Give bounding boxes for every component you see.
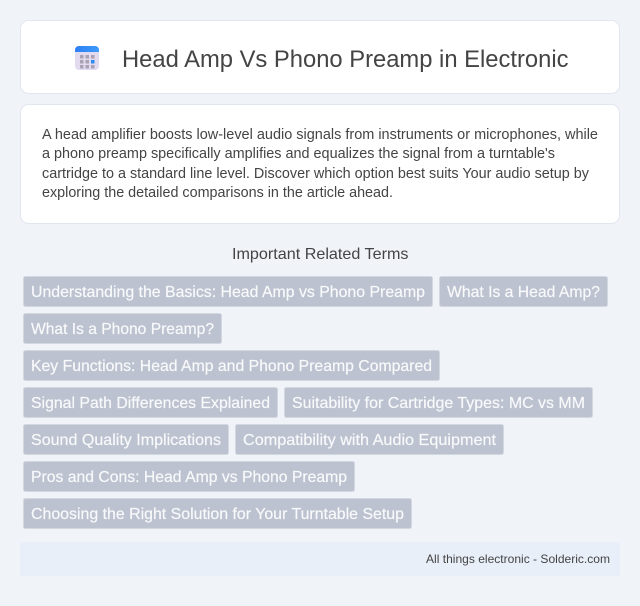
tag: signal path (24, 388, 278, 418)
text block: intro paragraph (42, 127, 598, 201)
footer (20, 542, 620, 576)
title: Head Amp Vs Phono Preamp in Electronic (122, 46, 568, 73)
text block: intro paragraph: cartridge to a standard line level. Discover which option best suits Your audio setup by (42, 166, 590, 182)
tag: what is a phono preamp: What Is a Phono Preamp? (31, 321, 214, 338)
tag: sound quality (24, 424, 228, 454)
tag: key functions: Key Functions: Head Amp and Phono Preamp Compared (31, 358, 432, 375)
tag: choosing the right solution: Choosing the Right Solution for Your Turntable Setup (31, 506, 404, 523)
tag: sound quality: Sound Quality Implications (31, 432, 221, 449)
tag: choosing the right solution (24, 498, 412, 528)
icon: calendar (75, 46, 99, 70)
text block: intro paragraph: A head amplifier boosts low-level audio signals from instruments or microphones, while (42, 127, 598, 143)
tag: signal path: Signal Path Differences Explained (31, 395, 270, 412)
tag: cartridge suitability: Suitability for Cartridge Types: MC vs MM (292, 395, 585, 412)
panel: related term tags (24, 276, 608, 528)
tag: what is a phono preamp (24, 314, 222, 344)
panel: title card (20, 20, 620, 94)
tag: understanding the basics (24, 276, 432, 306)
panel: intro text (20, 104, 620, 224)
text block: intro paragraph: a phono preamp specifically amplifies and equalizes the signal from a turntable's (42, 146, 555, 162)
tag: key functions (24, 350, 440, 380)
heading: related terms: Important Related Terms (232, 246, 408, 263)
tag: compatibility (236, 424, 504, 454)
tag: understanding the basics: Understanding the Basics: Head Amp vs Phono Preamp (31, 284, 425, 301)
text block: intro paragraph: exploring the detailed comparisons in the article ahead. (42, 185, 393, 201)
tag: cartridge suitability (284, 388, 592, 418)
tag: what is a head amp (440, 276, 608, 306)
footer: All things electronic - Solderic.com (426, 552, 610, 566)
tag: compatibility: Compatibility with Audio Equipment (243, 432, 497, 449)
tag: pros and cons (24, 462, 354, 492)
tag: what is a head amp: What Is a Head Amp? (447, 284, 600, 301)
tag: pros and cons: Pros and Cons: Head Amp vs Phono Preamp (31, 469, 347, 486)
